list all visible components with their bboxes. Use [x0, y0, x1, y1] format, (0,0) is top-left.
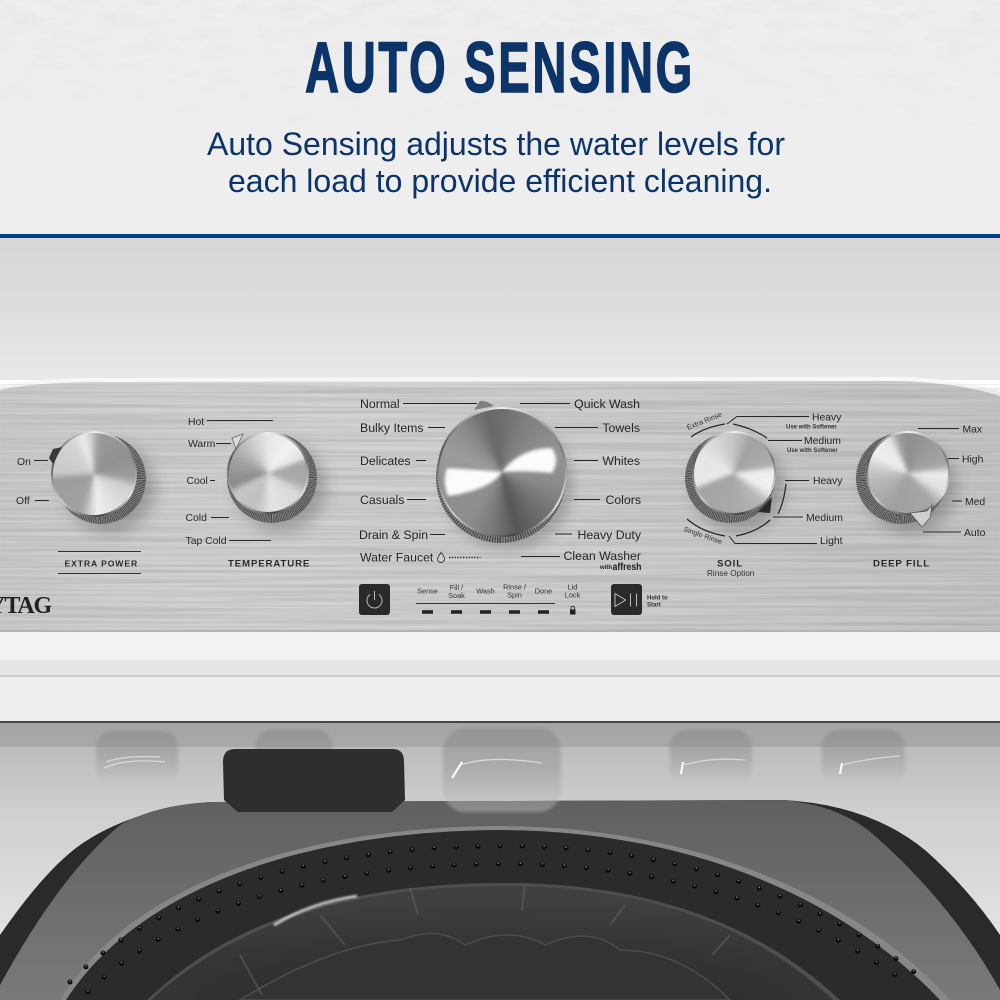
power button	[359, 584, 390, 615]
wash cycle labels right: with	[599, 565, 612, 571]
knob pointers	[49, 401, 932, 527]
washer console white body	[0, 628, 1000, 724]
temperature labels: Warm	[188, 439, 215, 450]
soil labels: Extra Rinse	[685, 410, 723, 432]
wash cycle labels left: Water Faucet	[360, 550, 434, 564]
start button: Start	[647, 602, 661, 608]
cycle status indicators: Soak	[448, 591, 465, 600]
temperature labels	[186, 417, 310, 570]
header background	[0, 0, 1000, 235]
wash cycle labels right: Whites	[602, 454, 640, 468]
temperature labels: Cold	[186, 513, 207, 524]
description: Auto Sensing adjusts the water levels for	[207, 126, 785, 162]
glass knob highlights	[104, 756, 900, 768]
wash cycle labels right: Heavy Duty	[577, 528, 642, 542]
soil labels	[682, 410, 843, 578]
soil labels: Rinse Option	[707, 569, 755, 578]
cycle status indicators: Lock	[565, 590, 581, 600]
temperature labels: Cool	[186, 476, 208, 487]
temperature labels: Tap Cold	[186, 536, 227, 547]
soil labels: Light	[820, 536, 843, 547]
deep fill labels: Max	[962, 424, 983, 436]
soil labels: Heavy	[812, 412, 842, 424]
drum perforations	[70, 845, 930, 992]
wash cycle labels left: Drain & Spin	[359, 528, 428, 542]
deep fill labels: Med	[965, 497, 985, 508]
cycle status indicators: Sense	[417, 586, 438, 596]
extra power labels: On	[17, 457, 31, 468]
wash cycle labels right: affresh	[612, 561, 642, 573]
cycle status indicators: Lid	[568, 582, 577, 592]
lid glass and lower washer	[0, 721, 1000, 1000]
soil labels: SOIL	[717, 558, 743, 570]
description	[207, 126, 785, 199]
wash cycle labels right: Colors	[605, 493, 641, 507]
temperature labels: Hot	[188, 417, 204, 428]
cycle status indicators	[416, 582, 581, 614]
wash cycle labels right: Clean Washer	[564, 549, 641, 563]
wash cycle labels right	[520, 397, 642, 573]
cycle status indicators: Spin	[507, 590, 522, 600]
wall behind washer	[0, 238, 1000, 380]
cycle status indicators: Rinse /	[503, 582, 527, 592]
control panel brushed steel	[0, 377, 1000, 630]
wash cycle labels left: Normal	[360, 397, 400, 411]
dark lid handle	[223, 749, 405, 812]
cycle status indicators: Done	[535, 586, 552, 596]
temperature labels: TEMPERATURE	[228, 558, 310, 570]
glass knob sparkles	[452, 762, 842, 778]
deep fill labels: DEEP FILL	[873, 558, 930, 570]
deep fill labels: High	[962, 454, 984, 466]
extra power labels: Off	[16, 496, 30, 507]
soil labels: Use with Softener	[786, 424, 837, 430]
description: each load to provide efficient cleaning.	[228, 163, 772, 199]
wash cycle labels left	[359, 397, 480, 564]
header rule	[0, 234, 1000, 238]
soil labels: Use with Softener	[787, 448, 838, 454]
start button: Hold to	[647, 596, 668, 602]
washer opening frame	[0, 800, 1000, 1000]
wash cycle labels left: Bulky Items	[360, 421, 424, 435]
drum inner basket	[147, 883, 840, 1000]
wash cycle labels left: Casuals	[360, 493, 404, 507]
glass knob reflections	[96, 728, 905, 812]
cycle status indicators: Fill /	[450, 583, 464, 592]
deep fill labels: Auto	[964, 528, 986, 539]
soil labels: Medium	[804, 436, 841, 447]
deep fill labels	[873, 424, 986, 570]
wash cycle labels right: Quick Wash	[574, 397, 640, 411]
title: AUTO SENSING	[305, 29, 695, 108]
wash cycle labels left: Delicates	[360, 454, 411, 468]
soil labels: Medium	[806, 513, 843, 524]
extra power labels: EXTRA POWER	[64, 558, 138, 568]
wash cycle labels right: Towels	[602, 421, 640, 435]
cycle status indicators: Wash	[476, 586, 495, 596]
soil labels: Heavy	[813, 476, 843, 487]
soil labels: Single Rinse	[682, 524, 723, 546]
extra power labels	[16, 457, 141, 574]
start button	[611, 584, 668, 615]
